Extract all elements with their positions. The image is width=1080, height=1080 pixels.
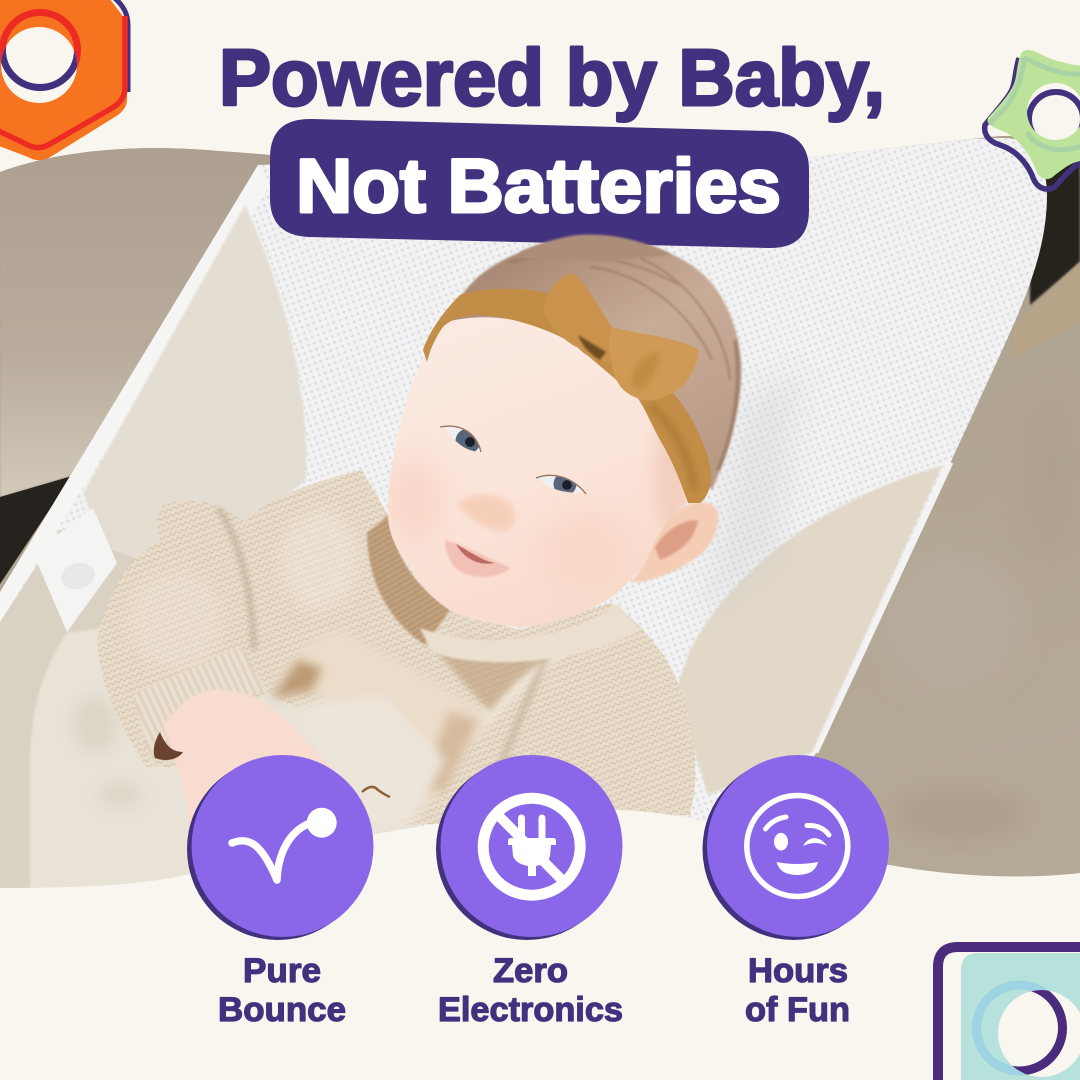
hair over pill <box>520 234 672 262</box>
hole <box>1 27 77 103</box>
dark background corner <box>1030 160 1080 305</box>
circle badge <box>702 755 889 940</box>
label: of Fun <box>745 991 850 1029</box>
teal block <box>961 953 1080 1080</box>
purple outline right side <box>112 0 128 92</box>
icon: winking face <box>747 796 848 896</box>
dark cuff gap <box>154 732 183 760</box>
label: Zero <box>493 952 568 990</box>
left beige panel <box>84 205 306 570</box>
decoration: green star <box>985 50 1080 189</box>
band shadow <box>650 405 695 490</box>
circle badge <box>436 755 622 940</box>
feature: hours of fun <box>702 755 889 1029</box>
title line 2: Not Batteries <box>296 144 781 229</box>
sweater fringe <box>270 630 490 815</box>
star hole <box>1027 83 1080 140</box>
dark gap under sofa <box>0 476 72 584</box>
title line 1: Powered by Baby, <box>219 33 885 122</box>
orange body <box>0 0 127 160</box>
muted green outline <box>990 58 1080 124</box>
mesh shadow by the head <box>715 390 790 591</box>
title pill <box>270 119 809 248</box>
lower left seat <box>0 530 140 890</box>
purple offset outline <box>985 58 1080 189</box>
bottom cream wave <box>0 810 1080 1080</box>
left eye <box>440 426 481 454</box>
photo: baby in bouncer <box>0 130 1080 936</box>
nose <box>458 494 515 531</box>
cream bib <box>295 695 445 825</box>
tan skirting band <box>1010 262 1080 360</box>
inner ear <box>655 520 698 560</box>
label: Hours <box>748 952 848 990</box>
decoration: orange hexagon nut <box>0 0 128 160</box>
right eye <box>536 474 586 494</box>
right beige panel <box>676 466 942 795</box>
blue ring <box>976 985 1062 1071</box>
purple outline <box>938 947 1080 1080</box>
sweater cuff <box>133 646 268 768</box>
headband <box>423 289 711 503</box>
floor mottling <box>909 798 1011 832</box>
purple ring arc <box>976 985 1062 1071</box>
purple ring arc <box>1029 92 1080 146</box>
hair strands <box>510 255 738 470</box>
seat white frame <box>0 165 270 622</box>
hair <box>440 234 742 490</box>
green body <box>987 50 1080 179</box>
linen pants <box>30 620 440 890</box>
muted ring <box>1027 132 1080 150</box>
decoration: teal square <box>938 947 1080 1080</box>
bouncer seat mesh <box>0 138 1047 900</box>
circle badge <box>187 755 374 940</box>
mouth <box>445 540 511 577</box>
white strap buckle <box>33 508 117 632</box>
feature: zero electronics <box>436 755 623 1029</box>
purple ring <box>1 46 77 91</box>
right frame edge <box>815 462 950 752</box>
red outline <box>0 16 125 148</box>
sofa <box>0 148 264 497</box>
pants shadows <box>74 699 138 806</box>
face <box>388 317 690 627</box>
hand <box>163 689 334 830</box>
sweater knit folds <box>127 508 575 805</box>
ear <box>630 502 718 582</box>
sweater collar <box>367 515 640 712</box>
red ring <box>2 12 78 88</box>
bow <box>543 273 699 401</box>
floor carpet <box>0 136 1080 936</box>
label: Pure <box>243 952 321 990</box>
teal hole <box>998 990 1080 1077</box>
feature: pure bounce <box>187 755 374 1029</box>
torso sweater <box>97 470 695 825</box>
icon: crossed out plug <box>483 798 580 895</box>
label: Bounce <box>218 991 346 1029</box>
icon: bouncing ball <box>232 808 337 880</box>
label: Electronics <box>438 991 623 1029</box>
bib button loop <box>362 787 390 797</box>
